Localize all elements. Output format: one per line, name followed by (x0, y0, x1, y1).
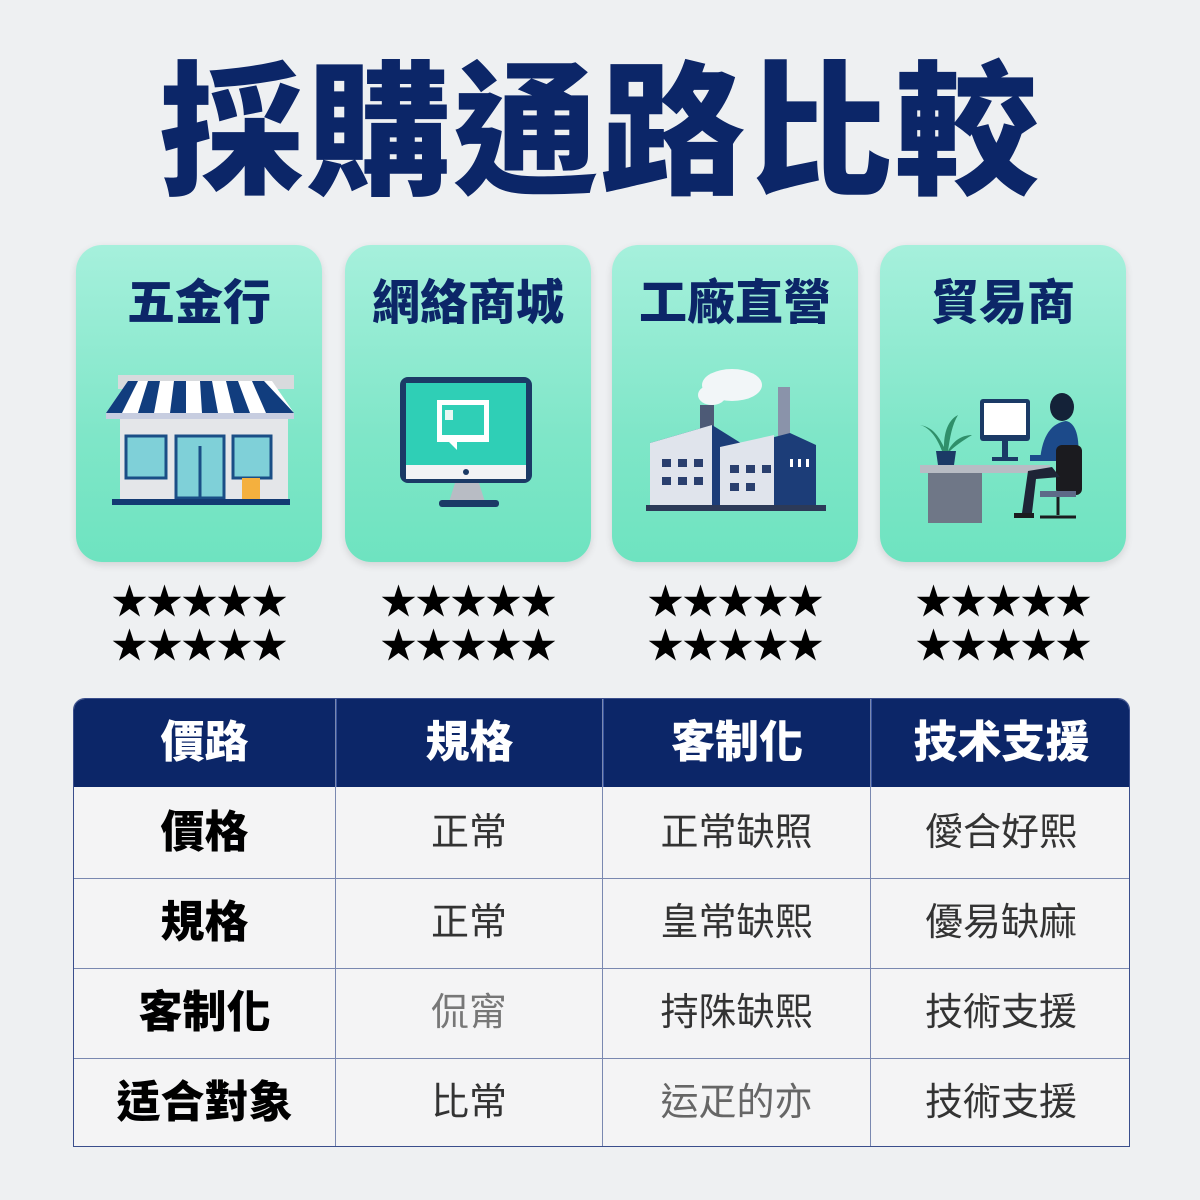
row: spec: 規格 (160, 898, 248, 947)
icon: monitor (400, 377, 532, 507)
row: spec (160, 898, 1077, 947)
row: target: 运疋的亦 (660, 1082, 812, 1124)
panel: online mall (345, 245, 591, 562)
row: price: 僾合好熙 (925, 812, 1077, 854)
icon: person at desk (920, 393, 1082, 523)
table header: 價路 (160, 718, 248, 767)
ratings: online mall: ★★★★★ (380, 625, 556, 666)
comparison table (73, 698, 1130, 1147)
heading: factory direct: 工廠直營 (639, 277, 831, 330)
table header: 客制化 (671, 718, 803, 767)
ratings: factory direct: ★★★★★ (647, 625, 822, 666)
table header: 技术支援 (914, 718, 1090, 767)
row: customization: 侃甯 (431, 992, 507, 1034)
row: target (116, 1078, 1077, 1127)
row: price: 價格 (160, 808, 248, 857)
row: price: 正常缺照 (660, 812, 812, 854)
ratings: hardware store: ★★★★★ (111, 625, 286, 666)
row: target: 比常 (431, 1082, 507, 1124)
panel: factory direct (612, 245, 858, 562)
heading: online mall: 網絡商城 (372, 277, 564, 330)
heading: trader: 貿易商 (931, 277, 1075, 330)
row: target: 适合對象 (116, 1078, 292, 1127)
ratings: online mall (380, 581, 556, 666)
title: 採購通路比較 (159, 52, 1041, 214)
ratings: online mall: ★★★★★ (380, 581, 556, 622)
ratings: factory direct (647, 581, 822, 666)
row: customization: 持陎缺熙 (660, 992, 812, 1034)
ratings: hardware store (111, 581, 286, 666)
row: target: 技術支援 (925, 1082, 1077, 1124)
ratings: hardware store: ★★★★★ (111, 581, 286, 622)
panel: trader (880, 245, 1126, 562)
row: price (160, 808, 1077, 857)
row: spec: 優易缺麻 (925, 902, 1077, 944)
ratings: factory direct: ★★★★★ (647, 581, 822, 622)
table header: 規格 (426, 718, 514, 767)
heading: hardware store: 五金行 (127, 277, 271, 330)
table header (74, 699, 1129, 787)
row: spec: 正常 (431, 902, 507, 944)
row: customization: 技術支援 (925, 992, 1077, 1034)
ratings: trader (915, 581, 1090, 666)
ratings: trader: ★★★★★ (915, 581, 1090, 622)
icon: storefront (106, 375, 294, 505)
icon: factory (646, 369, 826, 511)
row: customization (138, 988, 1077, 1037)
ratings: trader: ★★★★★ (915, 625, 1090, 666)
row: price: 正常 (431, 812, 507, 854)
row: customization: 客制化 (138, 988, 270, 1037)
panel: hardware store (76, 245, 322, 562)
row: spec: 皇常缺熙 (660, 902, 812, 944)
